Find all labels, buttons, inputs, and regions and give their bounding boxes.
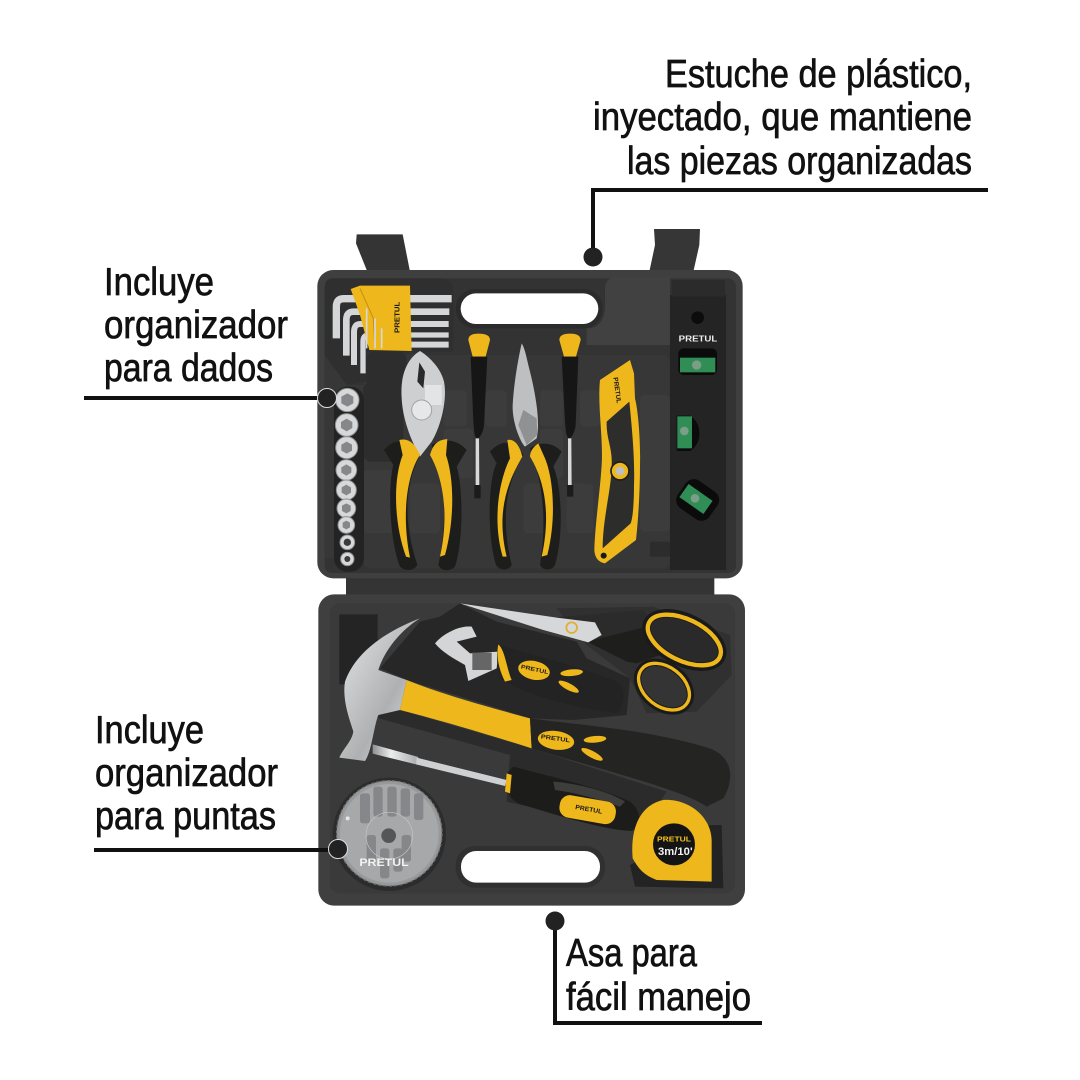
handle leader line: [555, 921, 762, 1023]
hammer brand: PRETUL: [540, 734, 571, 744]
upper loop: [638, 602, 731, 678]
grip: [530, 718, 730, 807]
handle label text: fácil manejo: [566, 976, 751, 1019]
vial 2: [677, 416, 699, 451]
spirit level: [670, 280, 726, 570]
callout: bit organizer: [94, 709, 348, 858]
scissors recess: [557, 607, 732, 713]
wrench recess: [380, 603, 630, 720]
bit label text: Incluye: [95, 709, 204, 752]
teeth: [417, 362, 425, 388]
tape measure: [632, 800, 712, 882]
bit label text: organizador: [95, 752, 278, 795]
scissors: [460, 602, 731, 721]
adjustable wrench: [435, 626, 624, 713]
socket label text: [104, 261, 288, 390]
socket leader line: [84, 396, 328, 400]
hinge strip: [346, 585, 714, 595]
pivot: [566, 622, 577, 633]
hex keys: [336, 299, 452, 373]
utility knife: [594, 360, 640, 563]
right precision screwdriver: [559, 334, 581, 497]
hinge strip: [346, 575, 714, 585]
wrench handle: [497, 644, 624, 713]
handle hole: [461, 293, 598, 324]
socket label text: organizador: [104, 304, 288, 347]
right clasp: [649, 229, 700, 272]
key holder: [351, 286, 412, 351]
corner panel by handle: [587, 277, 670, 345]
screwdriver: [373, 744, 639, 831]
knife brand: PRETUL: [611, 377, 622, 404]
pivot: [518, 410, 537, 445]
tray recess: [325, 278, 736, 573]
case label text: inyectado, que mantiene: [593, 96, 972, 139]
tape size: 3m/10': [658, 846, 693, 858]
case body: [317, 270, 743, 578]
case label text: Estuche de plástico,: [665, 53, 972, 96]
socket rail: [334, 387, 364, 572]
handle surround: [456, 846, 605, 888]
hammer grip recess: [373, 710, 667, 832]
holder brand: PRETUL: [393, 301, 402, 333]
toolbox bottom half: [318, 585, 745, 906]
case label text: [593, 53, 972, 183]
jaws: [401, 351, 445, 457]
hex keys and holder: [336, 286, 452, 373]
callout: case: [584, 53, 988, 266]
left clasp: [356, 234, 410, 272]
left handle: [490, 443, 523, 569]
tray moulded blocks: [325, 352, 670, 568]
hammer pocket: [339, 614, 378, 684]
left handle: [384, 441, 420, 570]
pivot: [412, 400, 432, 420]
screwdriver brand: PRETUL: [575, 804, 603, 816]
bit organizer: [333, 778, 446, 891]
slip joint pliers: [384, 351, 467, 570]
yellow neck: [400, 680, 532, 748]
toolbox top half: [317, 229, 743, 585]
handle surround: [456, 289, 603, 328]
handle label text: [566, 932, 751, 1019]
hex key recess: [325, 278, 453, 385]
callout: handle: [546, 912, 762, 1023]
organizer brand: PRETUL: [359, 857, 409, 869]
tray moulding: [330, 603, 735, 893]
long nose pliers: [490, 343, 562, 569]
tape recess: [630, 825, 723, 888]
right handle: [530, 444, 562, 569]
handle label text: Asa para: [566, 932, 697, 975]
left precision screwdriver: [468, 334, 490, 498]
bit label text: para puntas: [95, 795, 276, 838]
head: [339, 618, 420, 761]
hammer: [339, 618, 730, 807]
level brand: PRETUL: [679, 335, 717, 344]
right handle: [432, 440, 467, 570]
blade: [460, 603, 602, 642]
tape brand: PRETUL: [657, 835, 691, 844]
bit label text: [95, 709, 278, 838]
case leader line: [593, 190, 988, 255]
vial 3: [672, 475, 723, 525]
lower loop: [628, 652, 700, 721]
shanks: [588, 617, 660, 663]
socket label text: Incluye: [104, 261, 214, 304]
handle dot: [546, 912, 564, 930]
socket label text: para dados: [104, 347, 273, 390]
jaws: [513, 343, 538, 447]
hub: [381, 828, 396, 843]
case body: [318, 594, 745, 906]
bit leader line: [94, 848, 338, 852]
vial 1: [678, 348, 717, 375]
handle hole: [461, 851, 600, 883]
knife screw: [611, 462, 629, 480]
socket dot: [318, 388, 336, 408]
bit dot: [328, 840, 348, 858]
case dot: [584, 248, 602, 266]
callout: socket organizer: [84, 261, 336, 408]
wrench brand: PRETUL: [520, 664, 550, 676]
sockets: [334, 387, 364, 572]
case label text: las piezas organizadas: [627, 140, 972, 183]
